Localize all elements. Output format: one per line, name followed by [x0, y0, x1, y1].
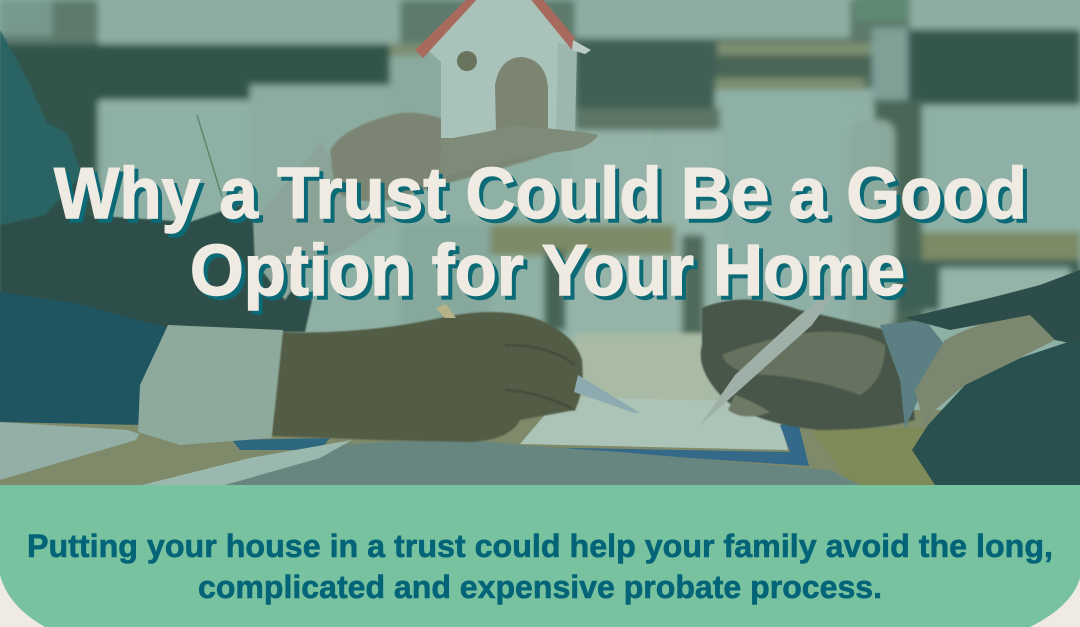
door: [495, 57, 548, 133]
right forearm skin: [915, 315, 1055, 410]
roof: [415, 0, 480, 58]
title text: [54, 154, 1027, 311]
grey folder: [210, 440, 860, 485]
table and paper: [0, 331, 942, 485]
left writing hand: [272, 312, 583, 442]
raised shirt cuff: [253, 142, 385, 300]
title shadow: Option for Your Home: [194, 235, 909, 315]
left shirt cuff: [138, 325, 283, 445]
laptop: [0, 422, 139, 480]
title shadow: [58, 158, 1031, 315]
photo: signing documents with a model house: [0, 0, 1080, 485]
left sleeve lower: [0, 292, 168, 425]
blue folder: [557, 424, 809, 466]
right pen: [700, 295, 833, 425]
left jacket and upper sleeve: [0, 30, 312, 332]
subtitle text: [27, 528, 1053, 605]
subtitle text: Putting your house in a trust could help your family avoid the long,: [27, 528, 1053, 564]
hand holding house: [330, 113, 598, 201]
subtitle text: complicated and expensive probate process.: [198, 569, 882, 605]
window: [457, 51, 477, 71]
document: [520, 397, 788, 450]
right writing hand: [701, 299, 915, 430]
title text: Option for Your Home: [190, 231, 905, 311]
house body: [426, 0, 576, 138]
icon: model house: [415, 0, 591, 138]
title: [54, 154, 1031, 315]
title text: Why a Trust Could Be a Good: [54, 154, 1027, 234]
book edge line: [197, 115, 222, 197]
right striped cuff: [880, 320, 945, 428]
pen in left hand: [574, 375, 640, 413]
subtitle panel: [0, 485, 1080, 627]
blurred shelves background: [0, 0, 1080, 410]
title shadow: Why a Trust Could Be a Good: [58, 158, 1031, 238]
right jacket: [905, 270, 1080, 485]
